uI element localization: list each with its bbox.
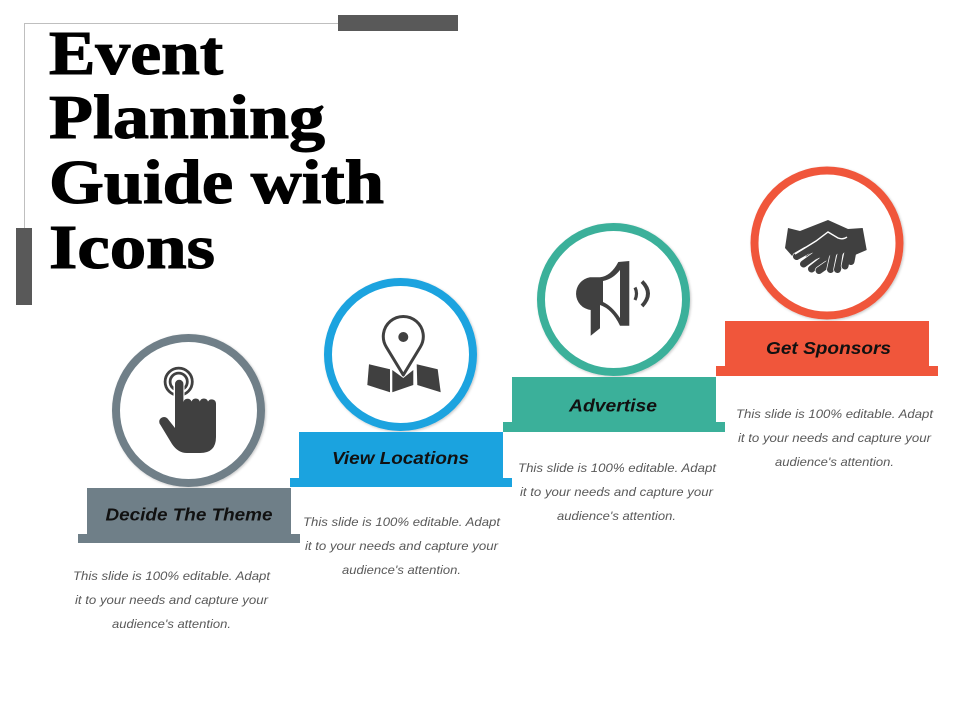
description: step 4: This slide is 100% editable. Adapt — [736, 407, 934, 421]
title: Planning — [49, 84, 325, 152]
top accent bar — [338, 15, 458, 31]
circle: step 2 — [328, 282, 473, 427]
step 3: advertise — [503, 227, 725, 523]
description: step 4 — [736, 407, 934, 469]
title: Icons — [49, 214, 215, 282]
label plinth: step 3 — [503, 377, 725, 432]
description: step 4: audience's attention. — [775, 455, 894, 469]
circle: step 1 — [116, 338, 261, 483]
circle: step 4 — [754, 170, 900, 316]
description: step 3 — [518, 461, 717, 523]
description: step 1: This slide is 100% editable. Adapt — [73, 569, 271, 583]
description: step 1: it to your needs and capture your — [75, 593, 269, 607]
description: step 3: This slide is 100% editable. Adapt — [518, 461, 717, 475]
description: step 2: audience's attention. — [342, 563, 461, 577]
label: step 3: Advertise — [568, 396, 657, 416]
icon: map with pin — [367, 316, 441, 392]
description: step 2: This slide is 100% editable. Adapt — [303, 515, 501, 529]
step 2: view locations — [290, 282, 512, 577]
icon: megaphone — [576, 261, 648, 336]
description: step 3: it to your needs and capture your — [520, 485, 714, 499]
step 1: decide the theme — [73, 338, 300, 631]
label plinth: step 1 — [78, 488, 300, 543]
title: Guide with — [49, 149, 384, 217]
description: step 2 — [303, 515, 501, 577]
description: step 3: audience's attention. — [557, 509, 676, 523]
description: step 1 — [73, 569, 271, 631]
description: step 2: it to your needs and capture your — [305, 539, 499, 553]
left accent bar — [16, 228, 32, 305]
label: step 1: Decide The Theme — [106, 504, 273, 524]
title — [49, 20, 384, 282]
title: Event — [49, 20, 223, 88]
label: step 4: Get Sponsors — [766, 338, 891, 358]
step 4: get sponsors — [716, 170, 938, 469]
label plinth: step 4 — [716, 321, 938, 376]
circle: step 3 — [541, 227, 686, 372]
description: step 1: audience's attention. — [112, 617, 231, 631]
label: step 2: View Locations — [332, 448, 469, 468]
icon: pointing hand — [159, 368, 216, 453]
description: step 4: it to your needs and capture your — [738, 431, 932, 445]
label plinth: step 2 — [290, 432, 512, 487]
icon: handshake — [785, 220, 867, 270]
